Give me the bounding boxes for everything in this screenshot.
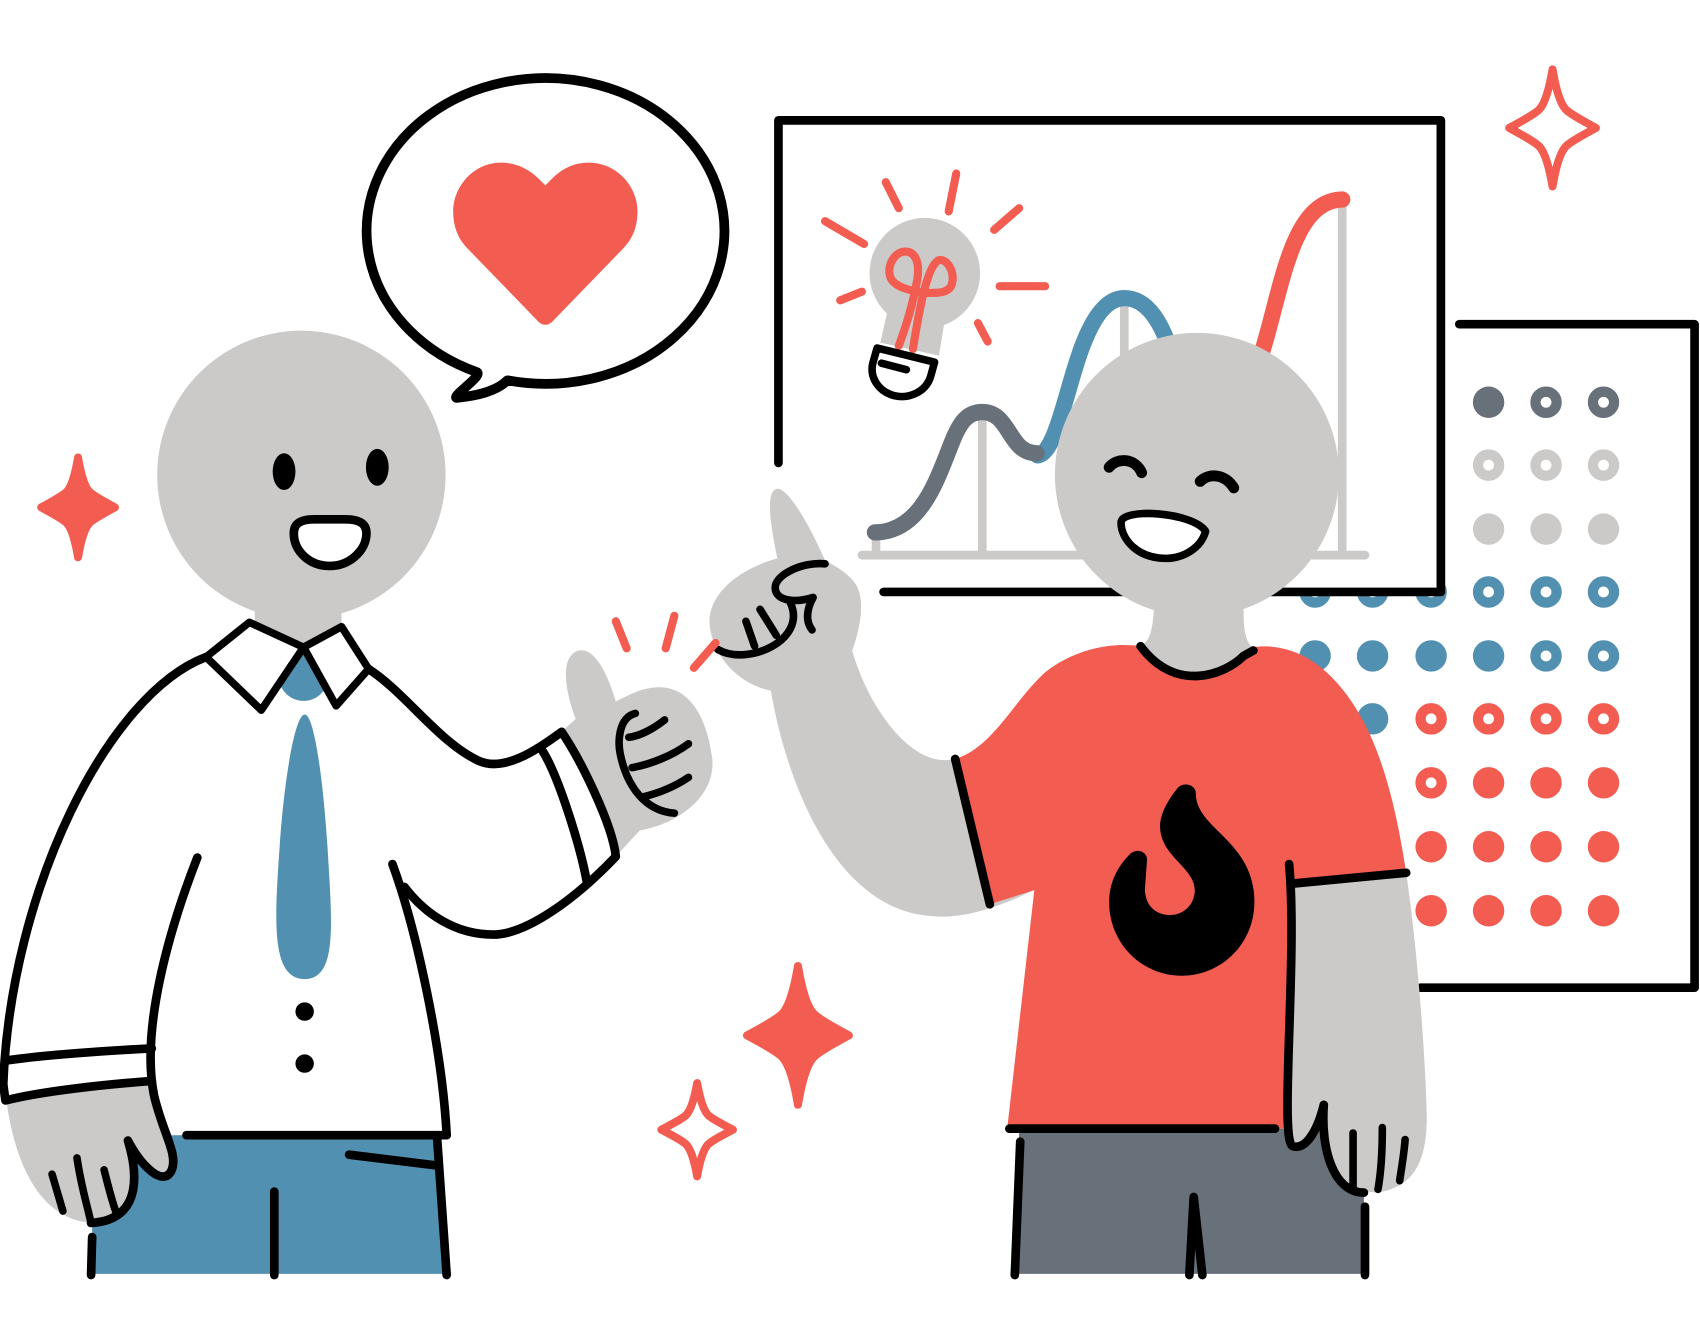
lower hand fill (7, 1081, 173, 1223)
bulb rays (825, 173, 1045, 342)
head (1055, 333, 1339, 617)
right eye (366, 449, 389, 486)
mouth (294, 519, 366, 566)
raised arm (710, 489, 1036, 917)
shirt outline (3, 657, 616, 1223)
mouth (1121, 513, 1206, 558)
character: man in shirt and tie (3, 331, 713, 1275)
left smiling eye (1109, 461, 1142, 473)
panel: dot grid (1299, 324, 1695, 988)
right smiling eye (1200, 476, 1234, 488)
shorts lines (1015, 1142, 1365, 1275)
chart: red curve (1261, 200, 1342, 356)
star: centre outline (661, 1083, 733, 1176)
shorts (1015, 1129, 1364, 1274)
pants lines (91, 1135, 447, 1275)
lower hand fingers (52, 1158, 116, 1223)
lower arm and hand (1288, 873, 1427, 1193)
chart: axis and gridlines (862, 202, 1365, 555)
tie knot (280, 648, 327, 701)
star: top right outline (1509, 69, 1596, 186)
star: left solid (41, 458, 115, 557)
icon: flame logo (1109, 784, 1254, 976)
bulb filament (889, 252, 953, 349)
left eye (273, 453, 295, 490)
panel: whiteboard (778, 120, 1441, 592)
bulb socket (872, 348, 935, 397)
dots: dark grey row (1473, 387, 1614, 418)
head (157, 331, 446, 619)
dots: red rows (1415, 708, 1619, 926)
tie (276, 714, 331, 979)
thumbs-up hand fill (562, 650, 713, 857)
t-shirt (955, 645, 1406, 1129)
chart: grey curve (875, 412, 1036, 532)
shirt collar (206, 622, 369, 710)
icon: light bulb (825, 173, 1045, 397)
thumbs-up hand fingers (619, 713, 688, 813)
spark lines between hands (616, 616, 716, 668)
bulb socket line (881, 363, 906, 370)
shirt and arm outlines (955, 646, 1406, 1193)
character: person in red t-shirt (710, 333, 1427, 1275)
neck (255, 596, 342, 645)
pants (92, 1135, 446, 1274)
neck (1141, 602, 1252, 672)
shirt body (3, 647, 616, 1135)
speech bubble (367, 78, 724, 398)
dots: blue rows (1299, 581, 1614, 735)
dots: light grey rows (1473, 455, 1619, 545)
pointing hand lines (718, 564, 825, 655)
shirt buttons (295, 1002, 314, 1073)
fingers of lower hand (1353, 1128, 1405, 1189)
icon: heart (453, 163, 638, 325)
star: centre solid (747, 966, 849, 1105)
chart: blue curve (1038, 298, 1168, 455)
